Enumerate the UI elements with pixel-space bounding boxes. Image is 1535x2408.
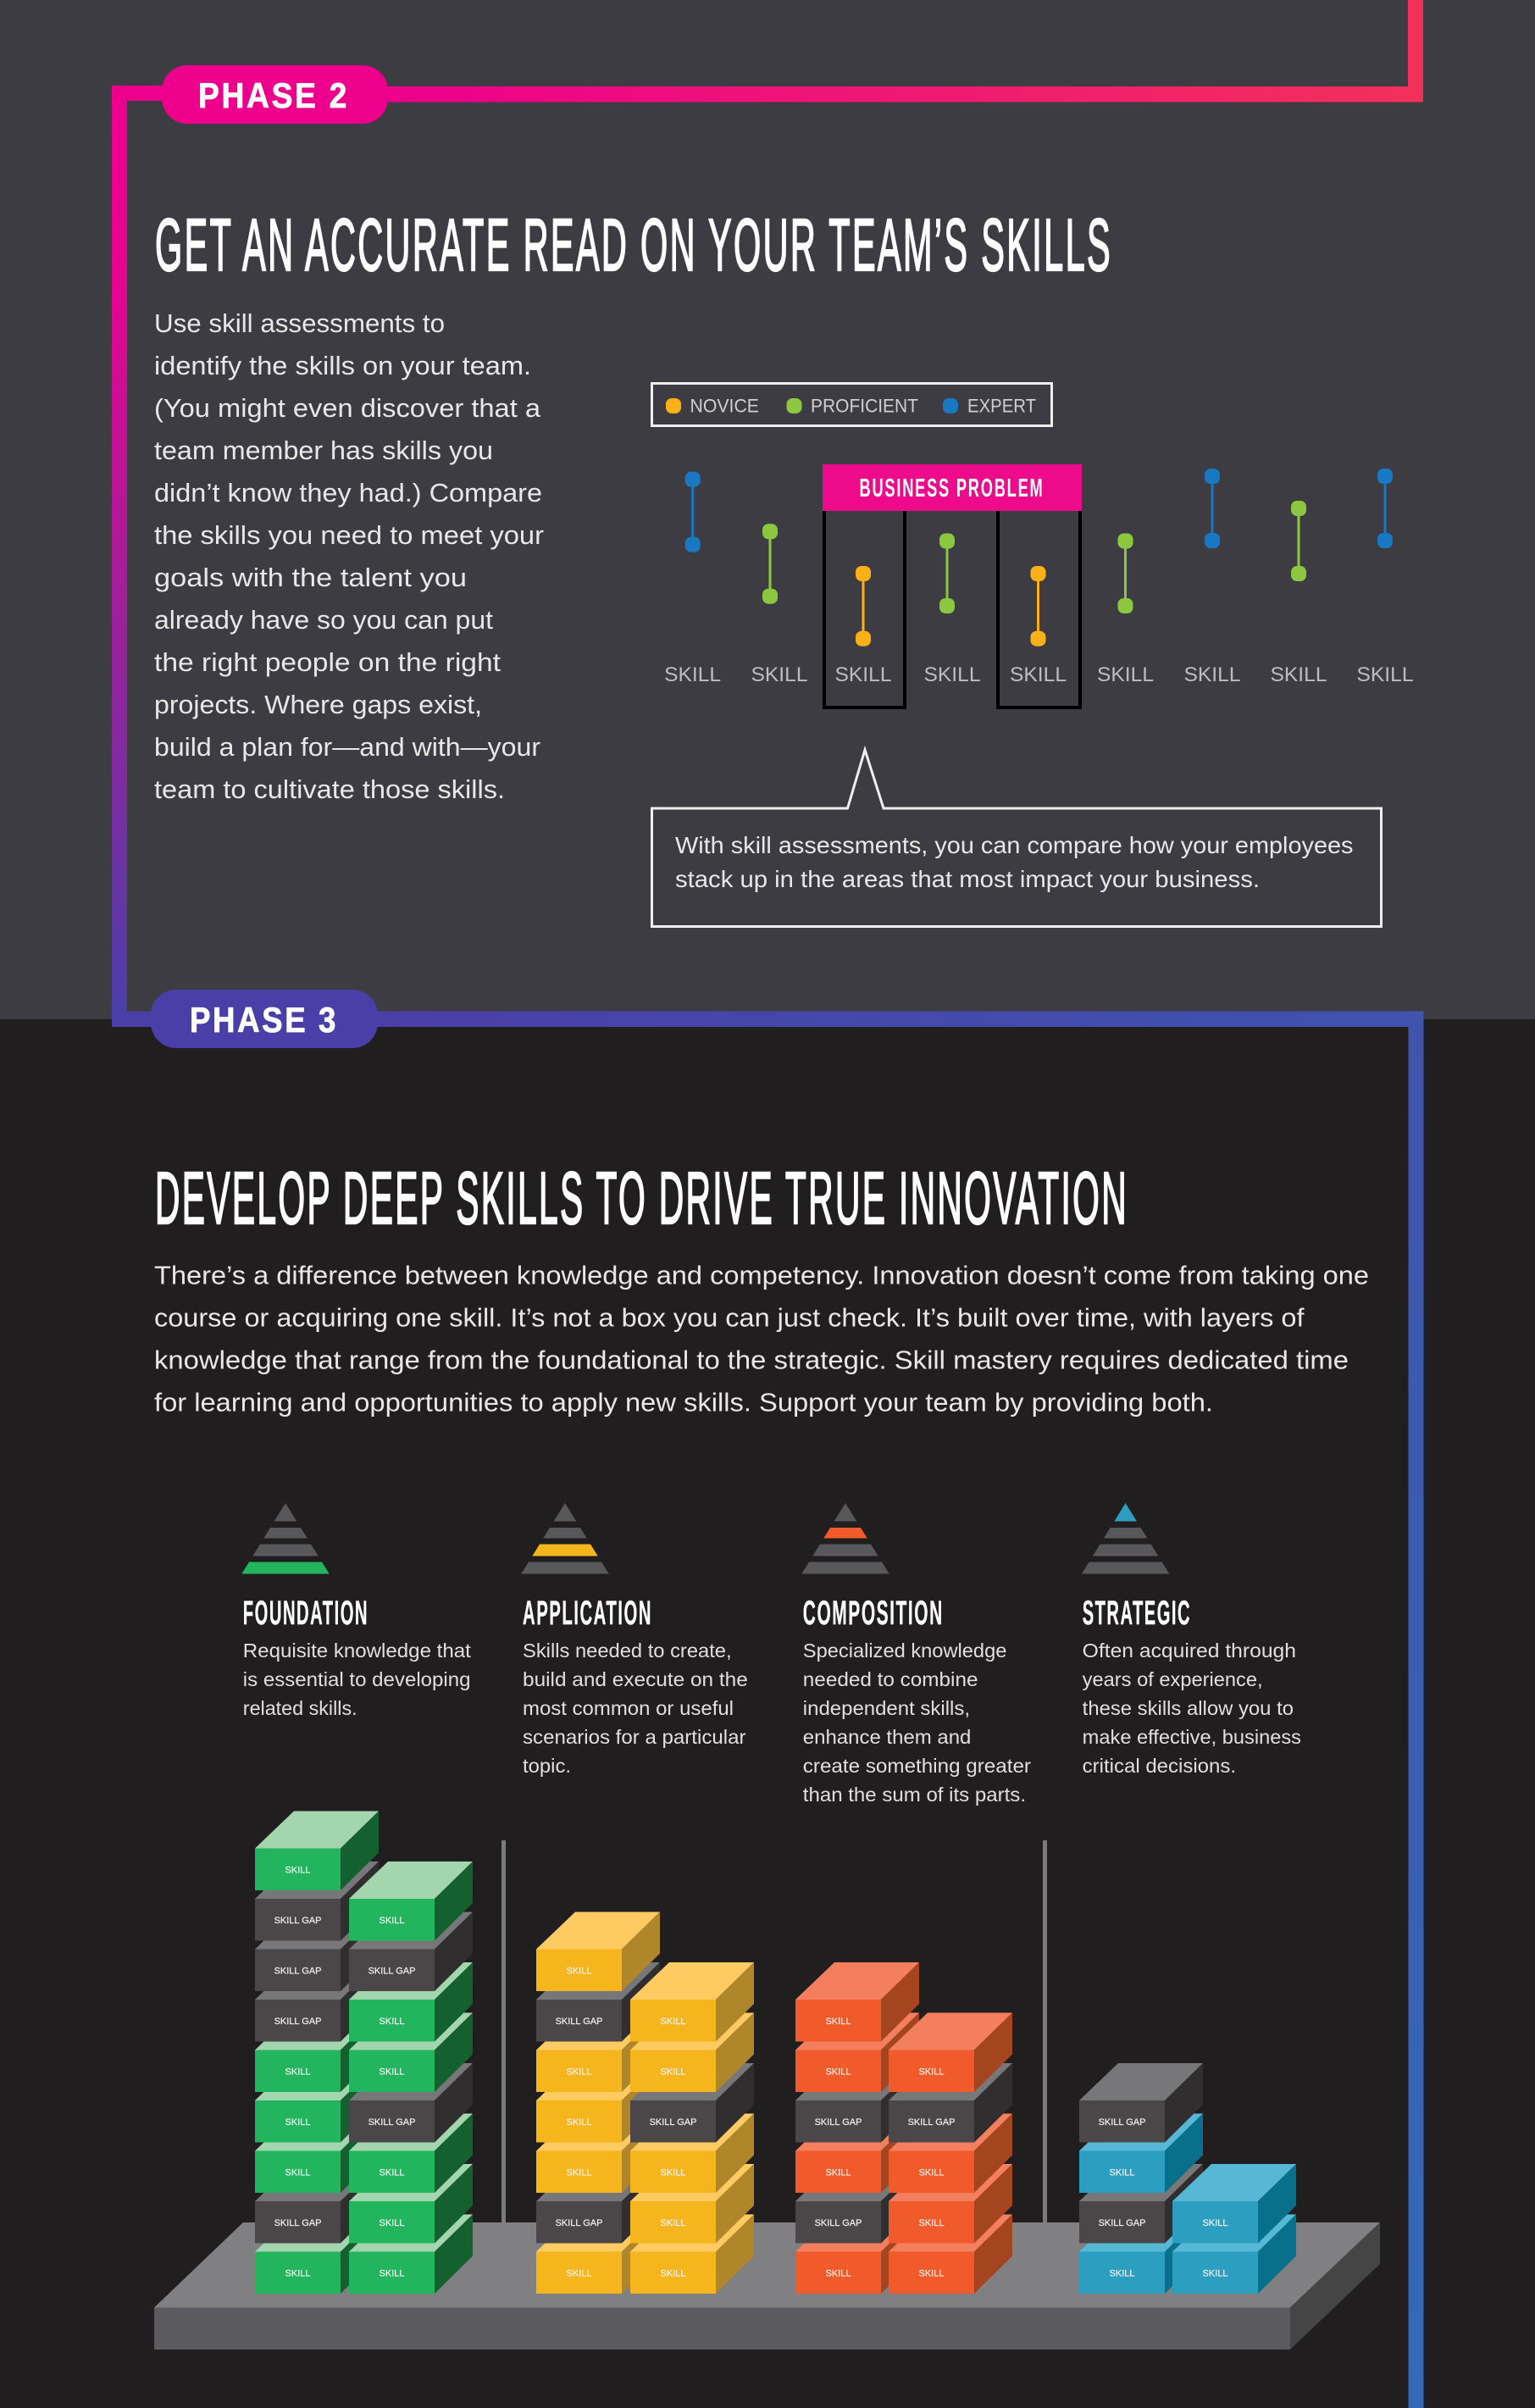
skill 8 proficient: SKILL [1271,663,1327,686]
foundation column 1: SKILL [285,2167,310,2178]
strategic title: STRATEGIC [1083,1595,1191,1632]
phase 2 body text: team to cultivate those skills. [154,774,505,804]
skill 5 novice [1010,566,1067,686]
application description: scenarios for a particular [523,1726,746,1748]
strategic column 1: SKILL GAP [1099,2117,1145,2128]
foundation column 2: SKILL [380,2269,404,2279]
composition description: Specialized knowledge [803,1640,1006,1662]
divider between foundation and application [502,1840,506,2222]
strategic column 1: SKILL [1110,2167,1134,2178]
skill 7 expert [1184,469,1240,686]
phase 2 badge: PHASE 2 [198,75,349,115]
application description [523,1640,748,1777]
phase 3 badge [151,990,378,1048]
icon: pyramid application [521,1503,609,1574]
application column 2 [630,1962,754,2294]
foundation description [243,1640,471,1719]
composition column 2: SKILL GAP [908,2117,955,2128]
background: phase 3 panel [0,1019,1535,2408]
strategic column 1: SKILL GAP [1099,2218,1145,2228]
strategic column 2 [1172,2164,1296,2294]
composition title: COMPOSITION [803,1595,944,1632]
skill 1 expert: SKILL [664,663,721,686]
composition column 1 [795,1962,919,2294]
business problem label [823,464,1082,511]
foundation column 2: SKILL GAP [369,2117,415,2128]
phase 2 body text: build a plan for—and with—your [154,732,540,762]
application column 1: SKILL GAP [556,2218,602,2228]
strategic column 2: SKILL [1203,2218,1227,2228]
application description: Skills needed to create, [523,1640,732,1662]
application title: APPLICATION [523,1595,652,1632]
callout: With skill assessments, you can compare how your employees [675,832,1354,858]
application column 2: SKILL [661,2067,685,2078]
foundation column 1 [255,1812,379,2294]
phase 2 badge [162,65,388,124]
foundation column 1: SKILL [285,2117,310,2128]
strategic description: critical decisions. [1083,1755,1236,1777]
business problem highlight columns [824,511,1080,707]
foundation description: is essential to developing [243,1668,471,1690]
composition description: than the sum of its parts. [803,1784,1026,1806]
phase 3 body text: course or acquiring one skill. It’s not a box you can just check. It’s built over time, with layers of [154,1303,1305,1332]
strategic column 1: SKILL [1110,2269,1134,2279]
application column 2: SKILL [661,2017,685,2027]
column: composition [801,1503,1031,1806]
skill 2 proficient: SKILL [751,663,808,686]
foundation column 1: SKILL [285,2269,310,2279]
column: strategic [1082,1503,1301,1777]
phase 2 body text: already have so you can put [154,605,493,635]
skill range chart [664,469,1413,686]
foundation column 2 [349,1861,473,2294]
foundation column 1: SKILL [285,2067,310,2078]
skill 9 expert: SKILL [1357,663,1413,686]
phase 2 body text: the right people on the right [154,647,501,677]
composition description [803,1640,1031,1806]
phase 3 body text [154,1261,1369,1417]
column: application [521,1503,748,1777]
composition column 2: SKILL [919,2269,944,2279]
skill 2 proficient [751,524,808,686]
foundation description: Requisite knowledge that [243,1640,471,1662]
composition stack [795,1962,1012,2294]
skill 1 expert [664,472,721,686]
strategic description: these skills allow you to [1083,1697,1294,1719]
phase 2 body text: projects. Where gaps exist, [154,690,482,719]
application column 1 [536,1911,660,2294]
legend [652,383,1052,425]
icon: pyramid strategic [1082,1503,1169,1574]
platform [154,2222,1380,2350]
skill 6 proficient [1097,534,1154,686]
composition description: independent skills, [803,1697,970,1719]
foundation column 2: SKILL [380,2218,404,2228]
skill 3 novice [835,566,891,686]
phase 3 body text: for learning and opportunities to apply new skills. Support your team by providing both. [154,1388,1213,1417]
strategic column 1 [1079,2063,1203,2294]
foundation column 1: SKILL [285,1866,310,1876]
divider between composition and strategic [1043,1840,1047,2222]
foundation column 2: SKILL GAP [369,1966,415,1976]
icon: pyramid composition [801,1503,889,1574]
foundation stack [255,1812,473,2294]
composition description: create something greater [803,1755,1031,1777]
application description: build and execute on the [523,1668,748,1690]
composition column 2 [889,2013,1012,2294]
skill 8 proficient [1271,501,1327,686]
application column 2: SKILL [661,2167,685,2178]
strategic stack [1079,2063,1296,2294]
skill 3 novice: SKILL [835,663,891,686]
composition column 1: SKILL [826,2167,851,2178]
phase 3 body text: There’s a difference between knowledge and competency. Innovation doesn’t come from taking one [154,1261,1369,1290]
phase 2 body text: team member has skills you [154,436,493,465]
foundation column 1: SKILL GAP [274,1916,321,1926]
foundation column 2: SKILL [380,2067,404,2078]
background: phase 2 panel [0,0,1535,1019]
foundation description: related skills. [243,1697,357,1719]
phase 2 body text: (You might even discover that a [154,393,541,423]
phase 2 body text: identify the skills on your team. [154,351,531,380]
phase 2 body text: Use skill assessments to [154,308,445,338]
skill 5 novice: SKILL [1010,663,1067,686]
strategic description [1083,1640,1301,1777]
phase 2 body text [154,308,544,804]
foundation column 1: SKILL GAP [274,2218,321,2228]
column: foundation [241,1503,471,1719]
strategic description: years of experience, [1083,1668,1263,1690]
application column 1: SKILL [567,2117,591,2128]
strategic description: make effective, business [1083,1726,1301,1748]
composition column 2: SKILL [919,2218,944,2228]
composition description: needed to combine [803,1668,978,1690]
phase 2 body text: the skills you need to meet your [154,520,544,550]
foundation column 1: SKILL GAP [274,1966,321,1976]
foundation column 2: SKILL [380,1916,404,1926]
phase 3 badge: PHASE 3 [190,1000,338,1040]
skill 4 proficient [923,534,981,686]
legend: PROFICIENT [811,395,918,417]
composition description: enhance them and [803,1726,971,1748]
skill 4 proficient: SKILL [923,663,981,686]
legend: EXPERT [967,395,1036,417]
application column 1: SKILL [567,2269,591,2279]
composition column 2: SKILL [919,2167,944,2178]
callout [652,750,1381,927]
application description: topic. [523,1755,571,1777]
application column 1: SKILL [567,2067,591,2078]
composition column 1: SKILL [826,2067,851,2078]
phase 2 body text: didn’t know they had.) Compare [154,478,542,508]
skill 6 proficient: SKILL [1097,663,1154,686]
callout: stack up in the areas that most impact your business. [675,866,1260,892]
application stack [536,1911,754,2294]
foundation title: FOUNDATION [243,1595,369,1632]
skill 9 expert [1357,469,1413,686]
phase 2 body text: goals with the talent you [154,563,467,592]
application column 1: SKILL [567,2167,591,2178]
application column 2: SKILL [661,2269,685,2279]
business problem label: BUSINESS PROBLEM [859,473,1044,502]
application column 1: SKILL GAP [556,2017,602,2027]
application column 1: SKILL [567,1966,591,1976]
composition column 1: SKILL [826,2017,851,2027]
composition column 2: SKILL [919,2067,944,2078]
application column 2: SKILL [661,2218,685,2228]
application column 2: SKILL GAP [650,2117,696,2128]
icon: pyramid foundation [241,1503,330,1574]
composition column 1: SKILL GAP [815,2117,862,2128]
skill 7 expert: SKILL [1184,663,1240,686]
legend: NOVICE [690,395,759,417]
strategic description: Often acquired through [1083,1640,1296,1662]
application description: most common or useful [523,1697,734,1719]
phase 3 body text: knowledge that range from the foundational to the strategic. Skill mastery requires dedicated time [154,1345,1349,1374]
foundation column 2: SKILL [380,2167,404,2178]
foundation column 2: SKILL [380,2017,404,2027]
composition column 1: SKILL [826,2269,851,2279]
strategic column 2: SKILL [1203,2269,1227,2279]
foundation column 1: SKILL GAP [274,2017,321,2027]
composition column 1: SKILL GAP [815,2218,862,2228]
